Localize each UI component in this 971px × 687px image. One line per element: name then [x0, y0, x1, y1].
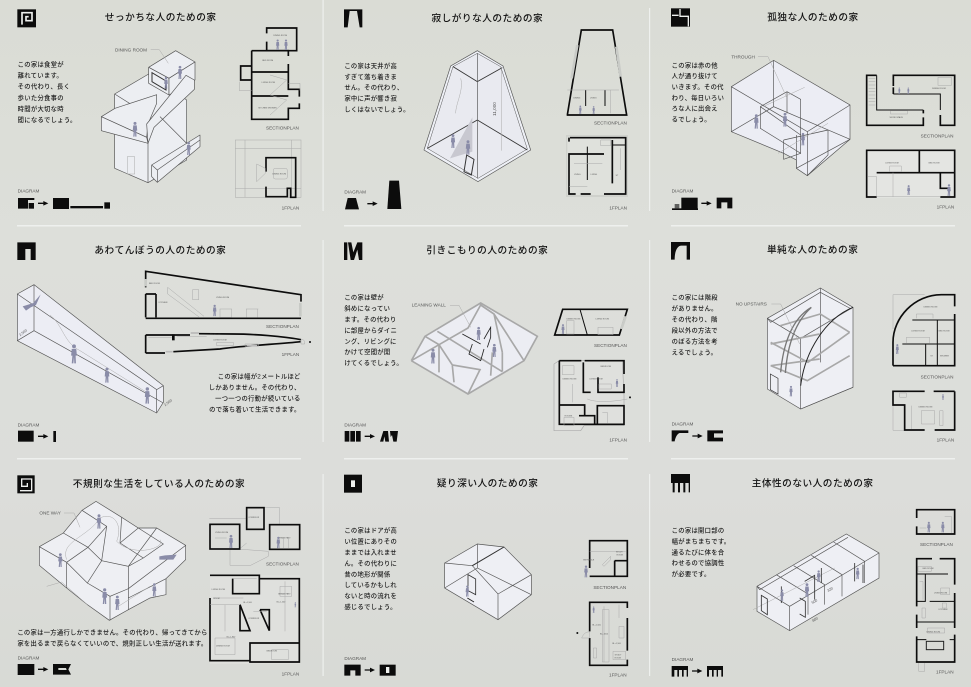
- label: 1FPLAN: [937, 438, 954, 443]
- 1F plan: [554, 361, 631, 443]
- 1F plan: CORRIDOR: [248, 618, 260, 620]
- label: SECTIONPLAN: [266, 561, 299, 566]
- 1F plan: ROOM: [213, 598, 220, 600]
- 1F plan: BL+1,500: [277, 601, 286, 603]
- section plan: DINING ROOM: [932, 88, 946, 90]
- icon: [671, 242, 690, 260]
- body text: この家には階段: [672, 295, 718, 302]
- 1F plan: DINING ROOM: [919, 406, 933, 408]
- body text: かけて空間が開: [344, 347, 391, 356]
- body text: るでしょう。: [672, 115, 711, 123]
- label: 1FPLAN: [609, 673, 627, 678]
- body text: この家はドアが高: [344, 528, 397, 535]
- 1F plan: KITCHEN: [939, 609, 948, 611]
- icon: [344, 9, 362, 27]
- 1F plan: [210, 575, 300, 677]
- body text: 家中に声が響き寂: [344, 93, 397, 102]
- 1F plan: [893, 391, 955, 443]
- body text: 人が通り抜けて: [672, 71, 718, 80]
- 1F plan: [146, 333, 311, 357]
- icon: [17, 475, 35, 493]
- isometric drawing: 320: [826, 586, 834, 593]
- 1F plan: LIVING ROOM: [934, 592, 948, 594]
- body text: 感じるでしょう。: [344, 602, 397, 611]
- label: through: THROUGH: [731, 55, 755, 60]
- label: SECTIONPLAN: [920, 542, 953, 547]
- 1F plan: BEDROOM: [601, 366, 611, 368]
- 1F plan: BED ROOM: [929, 162, 940, 164]
- isometric drawing: [736, 288, 853, 409]
- section plan: BED ROOM: [262, 60, 273, 62]
- 1F plan: BL+1,500: [243, 602, 253, 604]
- title: 主体性のない人のための家: [752, 477, 874, 489]
- section plan: DINING ROOM: [273, 35, 287, 37]
- section plan: LIVING ROOM: [216, 297, 230, 299]
- section plan: DINING ROOM: [567, 319, 581, 321]
- isometric drawing: 500: [811, 598, 818, 605]
- isometric drawing: [731, 55, 850, 176]
- label: leaning wall: LEANING WALL: [412, 303, 446, 308]
- section plan: ST: [930, 355, 934, 357]
- section plan: [209, 507, 300, 566]
- body text: せん。その代わり、: [344, 83, 403, 92]
- 1F plan: [866, 149, 956, 210]
- diagram: [344, 181, 401, 209]
- body text: この家は一方通行しかできません。その代わり、帰ってきてから: [17, 629, 208, 636]
- body text: しているかもしれ: [344, 581, 397, 589]
- 1F plan: STUDY: [615, 654, 622, 656]
- diagram: [18, 422, 56, 442]
- 1F plan: LIVING: [574, 174, 581, 176]
- body text: ないと時の流れを: [344, 591, 397, 600]
- label: SECTIONPLAN: [594, 121, 627, 126]
- panel: せっかちな人のための家: [17, 9, 301, 211]
- diagram: [344, 422, 398, 442]
- 1F plan: DINING ROOM: [926, 632, 940, 634]
- 1F plan: BEDROOM: [267, 650, 277, 652]
- body text: しくはないでしょう。: [344, 105, 410, 113]
- diagram: DIAGRAM: [672, 189, 694, 194]
- body text: ング、リビングに: [344, 336, 397, 345]
- body text: けてくるでしょう。: [344, 359, 403, 367]
- section plan: [917, 510, 955, 547]
- section plan: WORK SPACE: [890, 116, 904, 119]
- title: あわてんぼうの人のための家: [94, 245, 226, 257]
- panel: 孤独な人のための家: [671, 8, 956, 210]
- 1F plan: BED ROOM: [923, 568, 934, 570]
- section plan: LIVING: [590, 98, 597, 100]
- panel: 引きこもりの人のための家: [344, 242, 631, 443]
- diagram: DIAGRAM: [672, 657, 694, 662]
- label: no upstairs: NO UPSTAIRS: [736, 302, 767, 307]
- diagram: [18, 656, 71, 675]
- isometric drawing: [445, 544, 531, 620]
- body text: 離れています。: [18, 70, 63, 79]
- section plan: CORRIDOR: [248, 517, 260, 519]
- isometric drawing: [39, 501, 186, 620]
- section plan: DINING: [573, 98, 581, 100]
- 1F plan: BREAK FAST: [278, 593, 291, 596]
- panel: 寂しがりな人のための家: [344, 9, 628, 210]
- 1F plan: [917, 559, 955, 675]
- section plan: KITCHEN: [159, 302, 168, 304]
- diagram: DIAGRAM: [344, 189, 366, 194]
- body text: この家は幅が2メートルほど: [218, 374, 301, 381]
- 1F plan: [566, 135, 628, 210]
- body text: 幅がまちまちです。: [672, 536, 730, 545]
- section plan: [583, 541, 627, 590]
- panel: 不規則な生活をしている人のための家: [17, 475, 300, 677]
- 1F plan: BL+1000: [600, 634, 609, 636]
- section plan: LIVING ROOM: [262, 82, 275, 84]
- isometric drawing: [101, 47, 200, 183]
- panel: 疑り深い人のための家: [344, 475, 627, 678]
- label: one way: ONE WAY: [39, 511, 61, 516]
- icon: [344, 475, 362, 493]
- 1F plan: DINING ROOM: [563, 379, 577, 381]
- dimension: 800: [811, 616, 819, 623]
- body text: この家は食堂が: [18, 61, 64, 68]
- title: 不規則な生活をしている人のための家: [73, 478, 245, 490]
- body text: い位置にありその: [344, 537, 397, 546]
- 1F plan: BL+1,800: [227, 636, 236, 638]
- body text: ままでは入れませ: [344, 548, 397, 556]
- 1F plan: DINING ROOM: [272, 173, 286, 175]
- label: 1FPLAN: [937, 205, 954, 210]
- body text: 歩いた分食事の: [18, 93, 64, 102]
- body text: その代わり、長く: [18, 82, 70, 91]
- label: 1FPLAN: [936, 670, 954, 675]
- 1F plan: LIVING ROOM: [213, 339, 227, 341]
- body text: わせるので協調性: [672, 558, 725, 567]
- section plan: SHOWER: [940, 355, 949, 357]
- body text: いきます。その代: [672, 82, 724, 91]
- label: SECTIONPLAN: [266, 126, 299, 131]
- title: せっかちな人のための家: [105, 12, 217, 24]
- section plan: [893, 295, 955, 380]
- title: 寂しがりな人のための家: [431, 12, 543, 24]
- isometric drawing: [17, 285, 173, 413]
- diagram: DIAGRAM: [344, 422, 366, 427]
- icon: [671, 474, 690, 492]
- label: 1FPLAN: [282, 352, 299, 357]
- 1F plan: BEDROOM: [210, 334, 221, 336]
- body text: 斜めになってい: [344, 304, 390, 313]
- section plan: KITCHEN SHOWER: [258, 107, 277, 109]
- label: 1FPLAN: [282, 672, 299, 677]
- section plan: DINING ROOM: [924, 307, 938, 309]
- body text: すぎて落ち着きま: [344, 72, 397, 81]
- diagram: DIAGRAM: [344, 656, 366, 661]
- 1F plan: BL+1,500: [592, 624, 602, 626]
- panel: 単純な人のための家: [671, 242, 955, 443]
- body text: 通るたびに体を合: [672, 547, 725, 556]
- body text: に部屋からダイニ: [344, 325, 397, 334]
- body text: ん。その代わりに: [344, 558, 397, 567]
- section plan: BED ROOM: [149, 283, 160, 285]
- body text: ので落ち着いて生活できます。: [209, 405, 301, 414]
- title: 孤独な人のための家: [767, 12, 859, 24]
- panel: あわてんぼうの人のための家: [17, 242, 311, 442]
- label: 1FPLAN: [282, 206, 299, 211]
- diagram: [344, 656, 396, 676]
- 1F plan: DINING ROOM: [216, 646, 230, 648]
- icon: [17, 242, 36, 260]
- body text: しかありません。その代わり、: [209, 383, 301, 392]
- body text: が必要です。: [672, 569, 711, 578]
- body text: 家を出るまで戻らなくていいので、規則正しい生活が送れます。: [17, 638, 208, 647]
- dimension: 2,500: [18, 329, 28, 337]
- section plan: [555, 309, 627, 348]
- label: dining room: DINING ROOM: [115, 47, 147, 52]
- diagram: DIAGRAM: [672, 422, 694, 427]
- label: SECTIONPLAN: [593, 585, 626, 590]
- section plan: BREAK FAST: [278, 537, 291, 540]
- body text: えるでしょう。: [672, 348, 717, 356]
- label: SECTIONPLAN: [921, 134, 954, 139]
- diagram: DIAGRAM: [18, 189, 40, 194]
- section plan: LIVING ROOM: [215, 532, 229, 534]
- icon: [671, 8, 690, 27]
- diagram: [672, 189, 732, 210]
- section plan: ENTRANCE: [583, 559, 595, 562]
- 1F plan: [576, 602, 627, 678]
- dimension: 11,000: [492, 102, 497, 116]
- diagram: DIAGRAM: [18, 422, 40, 427]
- body text: がありません。: [672, 304, 718, 313]
- diagram: DIAGRAM: [18, 656, 40, 661]
- section plan: LIVING ROOM: [911, 330, 925, 332]
- section plan: [146, 271, 301, 329]
- section plan: ROOM: [617, 555, 623, 557]
- body text: ろな人に出会え: [672, 104, 718, 113]
- label: 1FPLAN: [609, 205, 627, 210]
- body text: この家は開口部の: [672, 528, 724, 535]
- title: 単純な人のための家: [767, 244, 858, 256]
- diagram: [672, 422, 723, 441]
- isometric drawing: 2,500: [163, 399, 173, 407]
- body text: 段以外の方法で: [672, 325, 718, 334]
- label: SECTIONPLAN: [594, 343, 627, 348]
- isometric drawing: [753, 534, 879, 631]
- label: SECTIONPLAN: [266, 324, 299, 329]
- label: 1FPLAN: [609, 438, 627, 443]
- 1F plan: LIVING ROOM: [885, 162, 899, 164]
- 1F plan: ROOM: [615, 658, 621, 660]
- icon: [344, 242, 362, 260]
- section plan: [567, 30, 627, 126]
- 1F plan: LIVING ROOM: [212, 589, 225, 591]
- 1F plan: LIVING ROOM: [589, 379, 603, 381]
- 1F plan: ROOMS: [565, 415, 573, 417]
- 1F plan: [235, 140, 301, 211]
- body text: ます。その代わり: [344, 314, 396, 323]
- body text: この家は壁が: [344, 295, 384, 302]
- body text: 昔の地形が関係: [344, 569, 391, 578]
- icon: spiral: [17, 9, 36, 27]
- body text: その代わり、階: [672, 315, 718, 324]
- body text: この家は天井が高: [344, 63, 397, 70]
- 1F plan: ST: [616, 175, 619, 177]
- title: 引きこもりの人のための家: [426, 245, 548, 257]
- panel: 主体性のない人のための家: [671, 474, 955, 677]
- 1F plan: BL+1,500: [612, 643, 622, 645]
- body text: のぼる方法を考: [672, 336, 718, 345]
- isometric drawing: [411, 303, 537, 394]
- body text: この家は赤の他: [672, 62, 718, 69]
- section plan: STUDY: [616, 552, 623, 554]
- body text: 間になるでしょう。: [18, 116, 77, 124]
- title: 疑り深い人のための家: [437, 478, 538, 490]
- diagram: [672, 657, 723, 677]
- section plan: [867, 75, 955, 139]
- section plan: BED ROOM: [939, 330, 950, 332]
- isometric drawing: [424, 51, 531, 182]
- 1F plan: LIVING: [591, 174, 598, 176]
- body text: わり、毎日いろい: [672, 93, 724, 102]
- body text: 時間が大切な時: [18, 104, 64, 113]
- body text: 一つ一つの行動が続いている: [215, 394, 301, 403]
- section plan: LIVING ROOM: [596, 319, 609, 321]
- label: SECTIONPLAN: [921, 375, 954, 380]
- section plan: [239, 28, 300, 131]
- diagram: [18, 189, 110, 209]
